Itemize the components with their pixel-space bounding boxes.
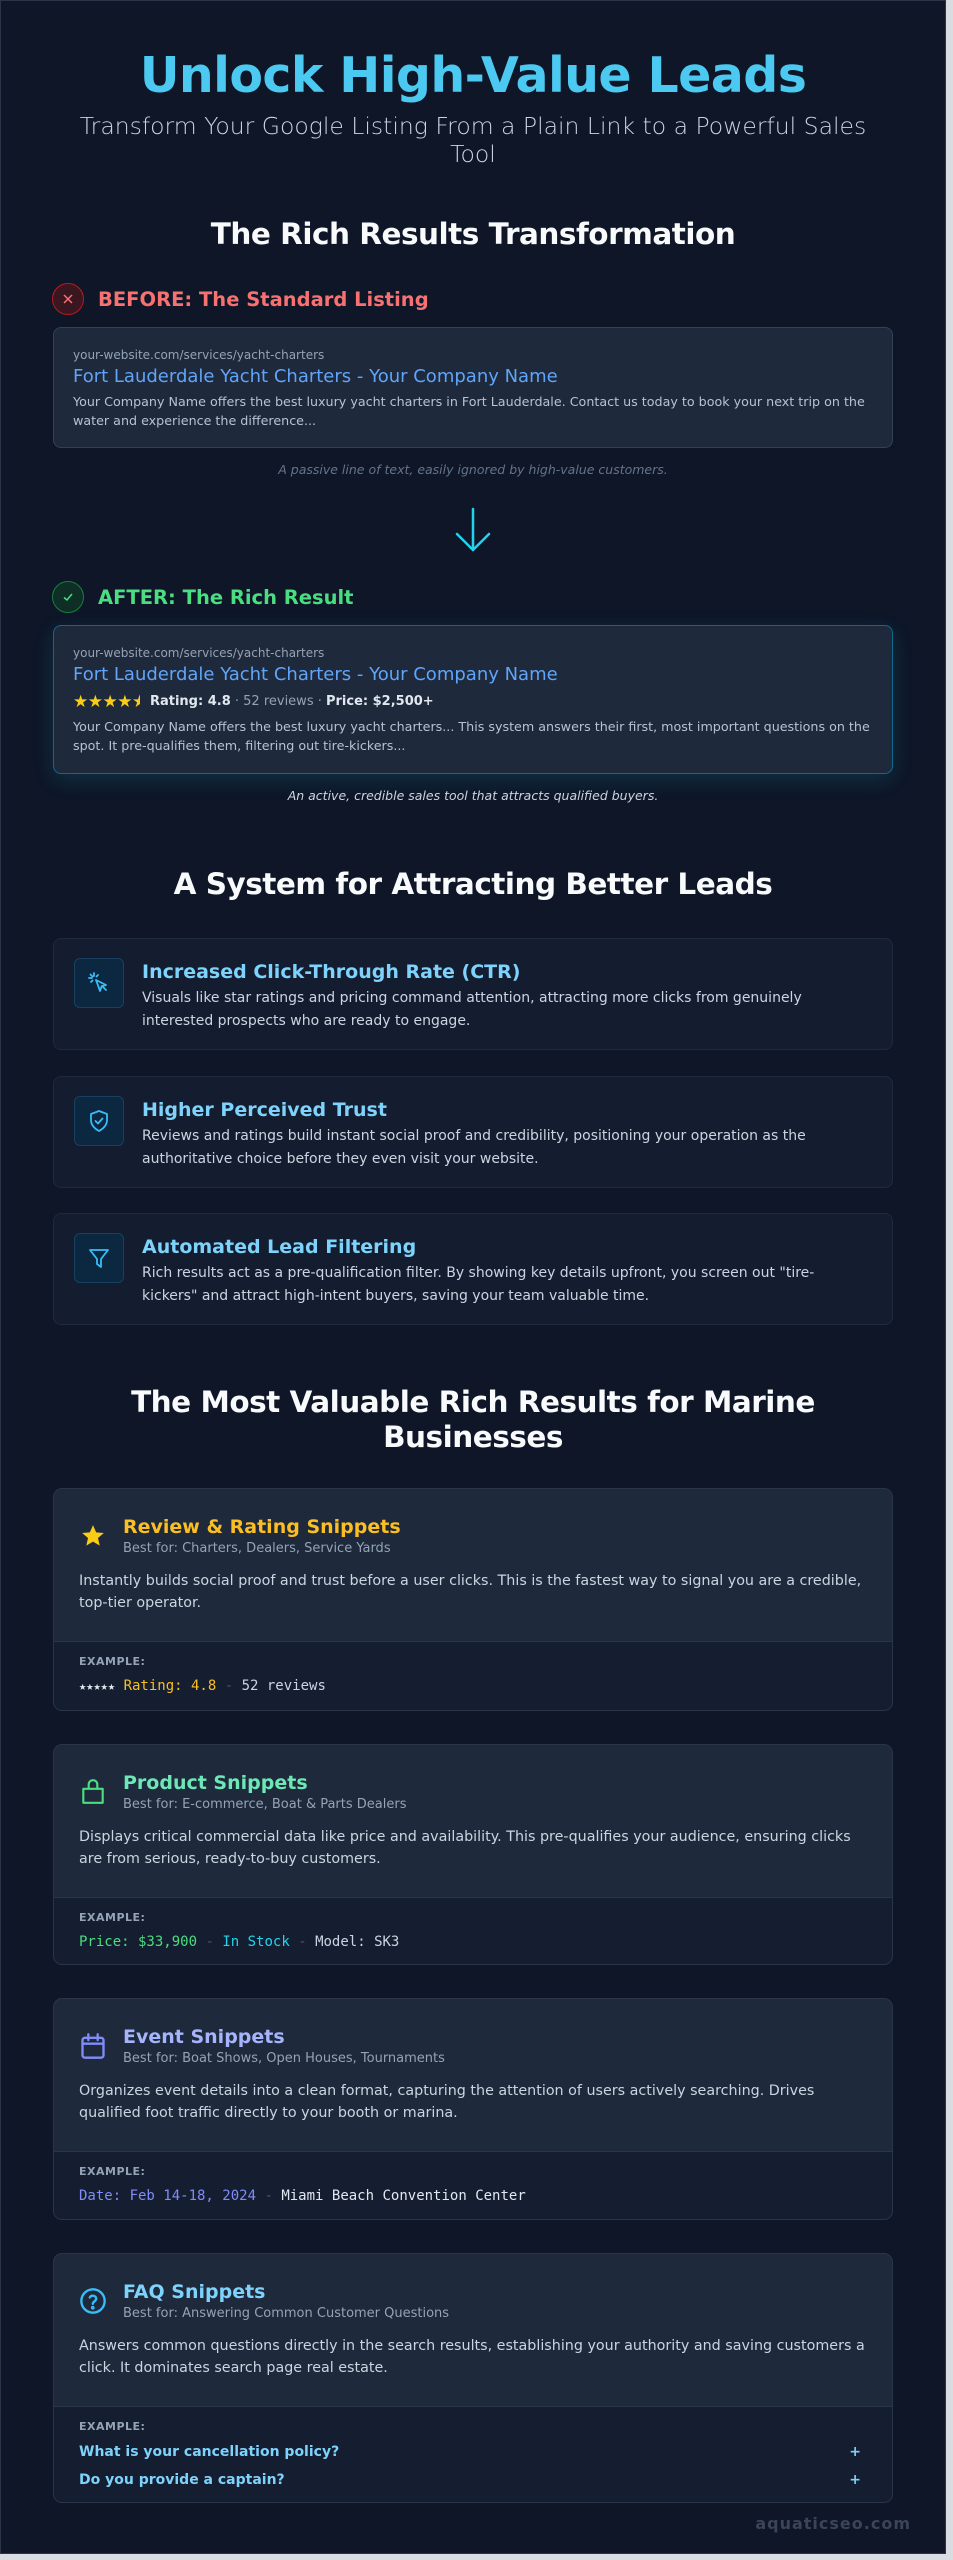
arrow — [456, 508, 490, 552]
rating row: Price: $2,500+ — [326, 694, 434, 709]
icon: question — [80, 2288, 106, 2314]
snippet card: faq: click. It dominates search page real estate. — [79, 2360, 388, 2376]
heading: transformation: The Rich Results Transformation — [211, 217, 735, 251]
subtitle — [80, 112, 866, 168]
snippet card: event: Event Snippets — [123, 2026, 285, 2048]
snippet card: faq: FAQ Snippets — [123, 2281, 265, 2303]
icon: x circle — [52, 283, 84, 315]
after header: AFTER: The Rich Result — [98, 586, 354, 608]
subtitle: Tool — [450, 140, 496, 168]
snippet card: review: ★★★★★ Rating: 4.8 - 52 reviews — [79, 1678, 326, 1694]
caption: after: An active, credible sales tool that attracts qualified buyers. — [288, 788, 658, 803]
after search card — [53, 625, 893, 774]
rating row: Rating: 4.8 — [150, 694, 231, 709]
feature: trust: Reviews and ratings build instant social proof and credibility, positioning your operation as the authoritative choice before they even visit your website. — [142, 1128, 806, 1167]
icon: calendar — [81, 2033, 105, 2059]
after search card: Fort Lauderdale Yacht Charters - Your Company Name — [73, 664, 558, 685]
feature: filtering: Rich results act as a pre-qualification filter. By showing key details upfront, you screen out "tire-kickers" and attract high-intent buyers, saving your team valuable time. — [142, 1265, 814, 1304]
snippet card: product: Best for: E-commerce, Boat & Parts Dealers — [123, 1797, 406, 1812]
before search card: Fort Lauderdale Yacht Charters - Your Company Name — [73, 366, 558, 387]
snippet card: faq — [53, 2253, 893, 2503]
snippet card: event: qualified foot traffic directly to your booth or marina. — [79, 2105, 458, 2121]
snippet card: review: EXAMPLE: — [79, 1655, 145, 1668]
snippet card: faq: Best for: Answering Common Customer Questions — [123, 2306, 449, 2321]
icon: shield — [74, 1096, 124, 1146]
feature: filtering: Automated Lead Filtering — [142, 1236, 416, 1258]
feature: filtering — [53, 1213, 893, 1325]
feature: CTR: Increased Click-Through Rate (CTR) — [142, 961, 520, 983]
heading: most valuable: Businesses — [383, 1420, 563, 1454]
watermark: aquaticseo.com — [755, 2514, 911, 2533]
before header: BEFORE: The Standard Listing — [98, 288, 429, 310]
rating row — [73, 692, 434, 712]
snippet card: product: EXAMPLE: — [79, 1911, 145, 1924]
snippet card: review: Best for: Charters, Dealers, Service Yards — [123, 1541, 391, 1556]
before search card — [53, 327, 893, 448]
caption: before: A passive line of text, easily ignored by high-value customers. — [278, 462, 668, 477]
snippet card: event: Date: Feb 14-18, 2024 - Miami Beach Convention Center — [79, 2188, 526, 2204]
rating row: ★★★★ — [73, 692, 132, 712]
icon: funnel — [74, 1233, 124, 1283]
subtitle: Transform Your Google Listing From a Plain Link to a Powerful Sales — [80, 112, 866, 140]
before search card: your-website.com/services/yacht-charters — [73, 348, 324, 362]
heading: system: A System for Attracting Better Leads — [174, 867, 772, 901]
snippet card: event: EXAMPLE: — [79, 2165, 145, 2178]
before search card: Your Company Name offers the best luxury yacht charters in Fort Lauderdale. Contact us today to book your next trip on the water and experience the difference... — [73, 394, 865, 428]
snippet card: faq: + — [849, 2472, 861, 2488]
snippet card: faq: What is your cancellation policy? — [79, 2444, 339, 2460]
after header — [52, 581, 354, 613]
feature: CTR — [53, 938, 893, 1050]
heading: most valuable — [131, 1385, 815, 1454]
feature: trust — [53, 1076, 893, 1188]
after search card: Your Company Name offers the best luxury yacht charters... This system answers their first, most important questions on the spot. It pre-qualifies them, filtering out tire-kickers... — [73, 719, 870, 753]
icon: click — [74, 958, 124, 1008]
before header — [52, 283, 429, 315]
title: Unlock High-Value Leads — [140, 47, 806, 104]
snippet card: product: Price: $33,900 - In Stock - Model: SK3 — [79, 1934, 399, 1950]
snippet card: review: Instantly builds social proof and trust before a user clicks. This is the fastest way to signal you are a credible, top-tier operator. — [79, 1573, 861, 1611]
snippet card: review — [53, 1488, 893, 1711]
snippet card: event: Best for: Boat Shows, Open Houses, Tournaments — [123, 2051, 445, 2066]
icon: check circle — [52, 581, 84, 613]
snippet card: review: Review & Rating Snippets — [123, 1516, 401, 1538]
snippet card: product — [53, 1744, 893, 1965]
snippet card: product: Displays critical commercial data like price and availability. This pre-qualifies your audience, ensuring clicks are from serious, ready-to-buy customers. — [79, 1829, 851, 1867]
feature: CTR: Visuals like star ratings and pricing command attention, attracting more clicks from genuinely interested prospects who are ready to engage. — [142, 990, 802, 1029]
snippet card: product: Product Snippets — [123, 1772, 308, 1794]
snippet card: faq: Do you provide a captain? — [79, 2472, 285, 2488]
icon: star — [82, 1525, 104, 1546]
snippet card: faq: EXAMPLE: — [79, 2420, 145, 2433]
snippet card: faq: Answers common questions directly in the search results, establishing your authority and saving customers a — [79, 2338, 865, 2354]
heading: most valuable: The Most Valuable Rich Results for Marine — [131, 1385, 815, 1419]
after search card: your-website.com/services/yacht-charters — [73, 646, 324, 660]
snippet card: faq: + — [849, 2444, 861, 2460]
snippet card: event — [53, 1998, 893, 2220]
snippet card: event: Organizes event details into a clean format, capturing the attention of users actively searching. Drives — [79, 2083, 814, 2099]
icon: bag — [82, 1779, 104, 1804]
feature: trust: Higher Perceived Trust — [142, 1099, 387, 1121]
rating row: · 52 reviews · — [235, 694, 322, 709]
